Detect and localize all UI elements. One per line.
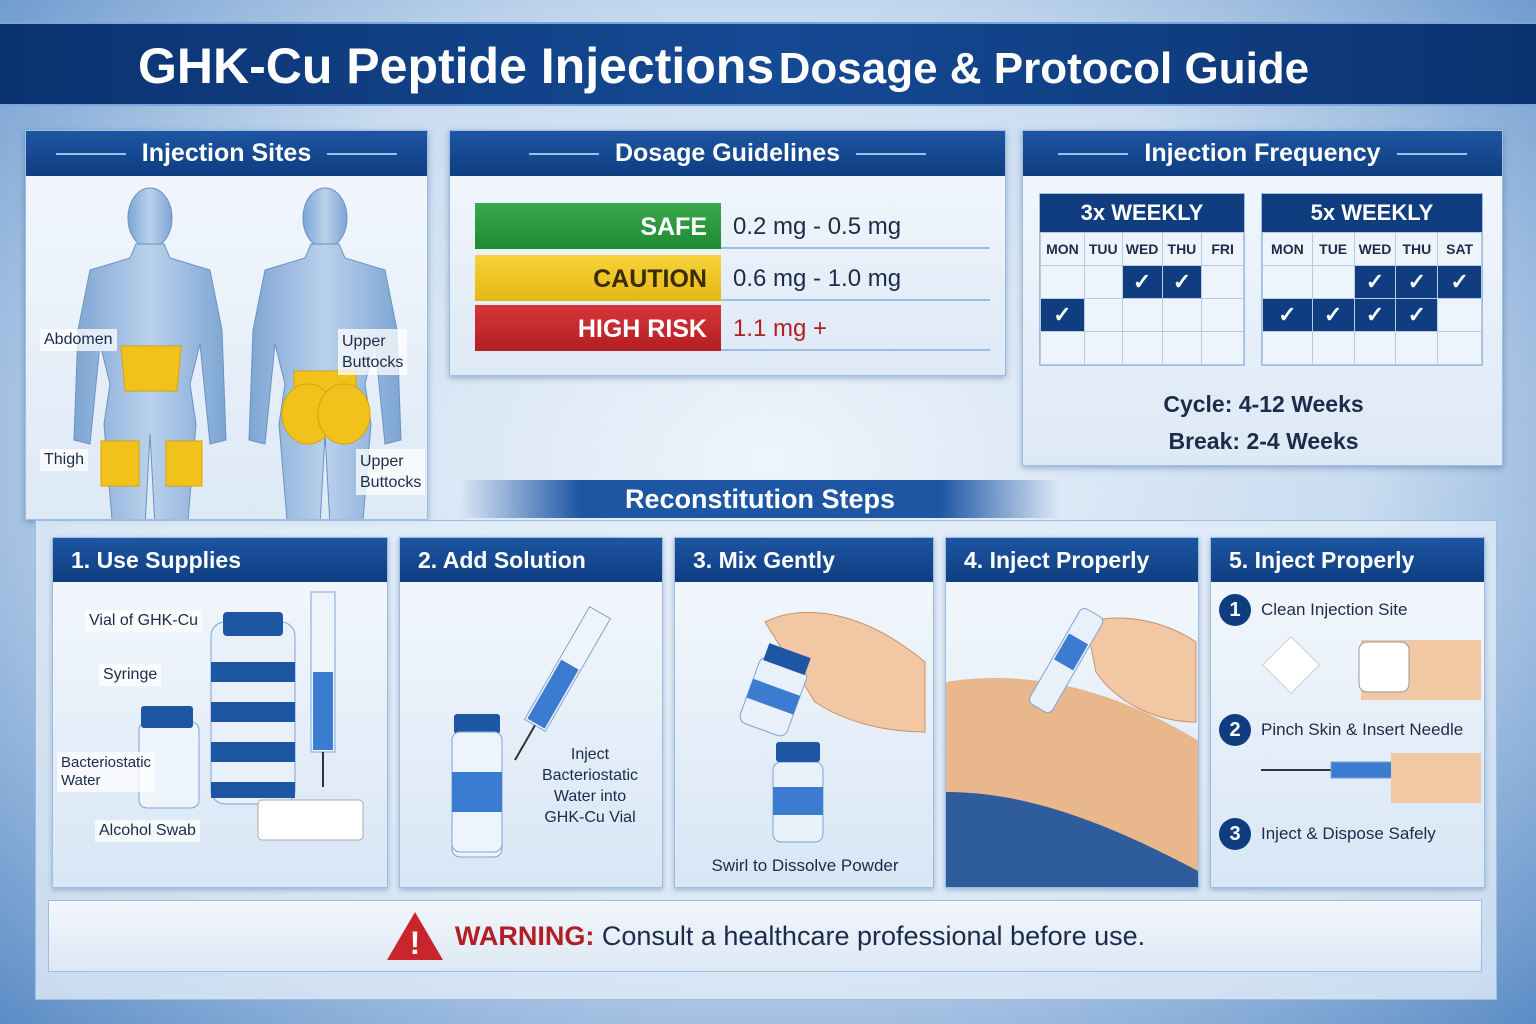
heading: injection sites (26, 131, 427, 176)
calendar: 3x weekly: 3x WEEKLY (1081, 200, 1203, 225)
label: upper buttocks 2: Upper (360, 453, 404, 470)
label: syringe: Syringe (103, 666, 157, 683)
sub-step 2: Pinch Skin & Insert Needle (1261, 720, 1463, 739)
title bar (0, 22, 1536, 106)
label: bacteriostatic water: Bacteriostatic (61, 754, 151, 771)
label: inject text: Water into (554, 788, 626, 805)
label: inject text (542, 746, 638, 826)
sub-step 1: Clean Injection Site (1261, 600, 1407, 619)
label: inject text: Inject (571, 746, 609, 763)
panel: reconstitution steps (35, 520, 1497, 1000)
panel: injection frequency (1022, 130, 1503, 466)
warning bar (48, 900, 1482, 972)
row: high risk (475, 305, 990, 351)
row: caution: 0.6 mg - 1.0 mg (733, 265, 901, 292)
illustration: swab (1262, 636, 1481, 700)
label: abdomen (40, 329, 116, 351)
calendar: 5x weekly: ✓ (1408, 302, 1426, 327)
calendar: 3x weekly: THU (1168, 241, 1196, 257)
illustration: supplies (138, 592, 364, 840)
step 5 (1210, 537, 1485, 888)
label: bacteriostatic water: Water (61, 772, 100, 789)
illustration: syringe into vial (452, 606, 611, 858)
calendar: 5x weekly: 5x WEEKLY (1311, 200, 1433, 225)
heading: reconstitution steps: Reconstitution Steps (625, 484, 895, 514)
calendar: 5x weekly: ✓ (1278, 302, 1297, 327)
illustration: injection into skin (946, 608, 1198, 887)
calendar: 5x weekly: WED (1359, 241, 1391, 257)
label: upper buttocks 2 (356, 449, 425, 495)
label: upper buttocks: Buttocks (342, 354, 403, 371)
calendar: 3x weekly: ✓ (1133, 269, 1151, 294)
step 3: 3. Mix Gently (693, 547, 835, 573)
step 1 (52, 537, 388, 888)
label: upper buttocks (338, 329, 407, 375)
calendar: 5x weekly: ✓ (1408, 269, 1426, 294)
row: safe: 0.2 mg - 0.5 mg (733, 213, 901, 240)
row: safe: SAFE (640, 213, 707, 241)
illustration: hand swirling vial (740, 612, 926, 842)
label: inject text: Bacteriostatic (542, 767, 638, 784)
label: upper buttocks: Upper (342, 333, 386, 350)
step 2 (399, 537, 663, 888)
icon: warning triangle: ! (410, 925, 420, 961)
calendar: 5x weekly: ✓ (1366, 269, 1384, 294)
calendar: 5x weekly: MON (1271, 241, 1304, 257)
heading: dosage (450, 131, 1005, 176)
label: alcohol swab: Alcohol Swab (99, 822, 196, 839)
text: cycle: Cycle: 4-12 Weeks (1163, 391, 1364, 417)
label: upper buttocks 2: Buttocks (360, 474, 421, 491)
heading: reconstitution steps (460, 480, 1060, 518)
calendar: 3x weekly: ✓ (1173, 269, 1191, 294)
calendar: 5x weekly (1261, 193, 1483, 366)
calendar: 5x weekly: SAT (1446, 241, 1473, 257)
step 5: 5. Inject Properly (1229, 547, 1414, 573)
label: thigh (40, 449, 88, 471)
calendar: 5x weekly: THU (1402, 241, 1431, 257)
heading: dosage: Dosage Guidelines (615, 139, 840, 167)
calendar: 3x weekly: WED (1126, 241, 1158, 257)
row: high risk: 1.1 mg + (733, 315, 827, 342)
label: inject text: GHK-Cu Vial (544, 809, 636, 826)
step 2: 2. Add Solution (418, 547, 586, 573)
label: thigh: Thigh (44, 451, 84, 468)
warning bar: WARNING: Consult a healthcare professional before use. (455, 920, 1145, 950)
step 4: 4. Inject Properly (964, 547, 1149, 573)
panel: dosage guidelines (449, 130, 1006, 376)
step 1: 1. Use Supplies (71, 547, 241, 573)
calendar: 5x weekly: TUE (1319, 241, 1347, 257)
title bar: GHK-Cu Peptide Injections Dosage & Protocol Guide (138, 38, 1309, 94)
heading: frequency (1023, 131, 1502, 176)
illustration: needle (1261, 753, 1481, 803)
row: caution (475, 255, 990, 301)
calendar: 3x weekly: ✓ (1053, 302, 1072, 327)
sub-step 1: 1 (1229, 599, 1241, 621)
label: vial: Vial of GHK-Cu (89, 612, 198, 629)
text: swirl: Swirl to Dissolve Powder (711, 856, 899, 875)
calendar: 3x weekly (1039, 193, 1245, 366)
calendar: 5x weekly: ✓ (1324, 302, 1342, 327)
sub-step 1 (1219, 594, 1407, 626)
sub-step 3 (1219, 818, 1436, 850)
heading: injection sites: Injection Sites (142, 139, 311, 167)
row: caution: CAUTION (593, 265, 707, 293)
calendar: 5x weekly: ✓ (1366, 302, 1384, 327)
calendar: 3x weekly: FRI (1211, 241, 1234, 257)
icon: warning triangle (387, 912, 443, 961)
row: high risk: HIGH RISK (578, 315, 707, 343)
illustration: body figures (74, 188, 402, 519)
panel: injection sites (25, 130, 428, 520)
sub-step 3: 3 (1229, 823, 1241, 845)
step 3 (674, 537, 934, 888)
text: break: Break: 2-4 Weeks (1168, 428, 1359, 454)
row: safe (475, 203, 990, 249)
heading: frequency: Injection Frequency (1144, 139, 1381, 167)
calendar: 5x weekly: ✓ (1450, 269, 1469, 294)
sub-step 2: 2 (1229, 719, 1241, 741)
sub-step 2 (1219, 714, 1463, 746)
sub-step 3: Inject & Dispose Safely (1261, 824, 1436, 843)
label: bacteriostatic water (57, 752, 155, 792)
label: syringe (99, 664, 161, 686)
label: abdomen: Abdomen (44, 331, 112, 348)
calendar: 3x weekly: MON (1046, 241, 1079, 257)
calendar: 3x weekly: TUU (1089, 241, 1118, 257)
step 4 (945, 537, 1199, 888)
